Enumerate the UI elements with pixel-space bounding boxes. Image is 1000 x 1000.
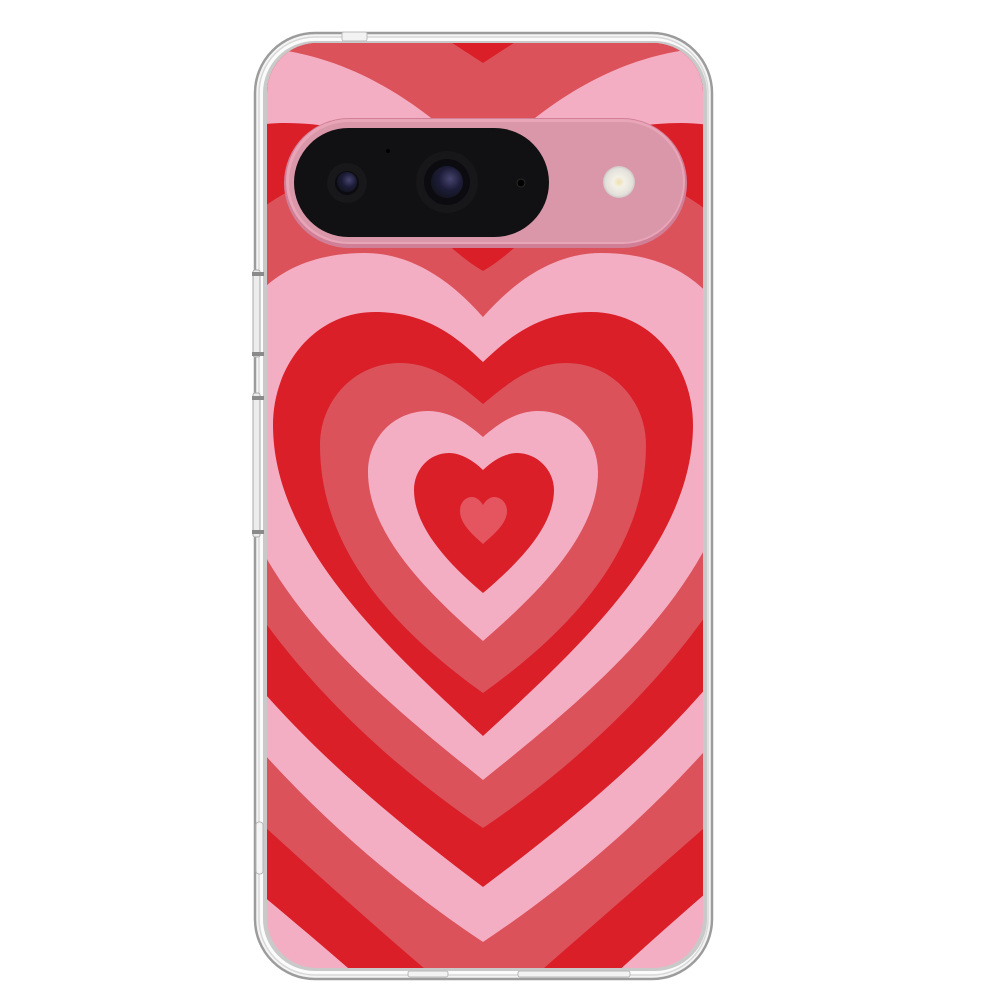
lens: main — [416, 151, 478, 213]
bottom edge port — [408, 971, 630, 977]
microphone dot — [517, 179, 525, 187]
heart ring: red 7 — [273, 312, 693, 736]
band: outer rose — [267, 43, 703, 968]
heart ring: rose 9 — [267, 194, 703, 828]
band: outer red — [267, 43, 703, 968]
heart ring: pink 8 — [267, 253, 703, 780]
top edge port — [342, 32, 367, 41]
sensor dot — [386, 149, 390, 153]
camera bar — [284, 118, 687, 248]
heart ring: pink 11 — [267, 51, 703, 942]
heart center: rose — [460, 497, 507, 544]
camera window — [294, 128, 549, 237]
side button: lower grip — [256, 822, 263, 874]
heart ring: pink 5 — [368, 411, 598, 641]
heart ring: red 10 — [267, 123, 703, 887]
heart ring: red 4 — [414, 453, 554, 593]
heart pattern artwork — [267, 43, 703, 968]
side button: power — [252, 270, 264, 357]
phone case product illustration — [252, 32, 714, 980]
side button: volume — [252, 393, 264, 537]
flash — [603, 166, 635, 198]
clear case frame — [255, 33, 712, 979]
lens: ultrawide — [327, 163, 367, 203]
heart ring: rose 6 — [320, 363, 646, 693]
